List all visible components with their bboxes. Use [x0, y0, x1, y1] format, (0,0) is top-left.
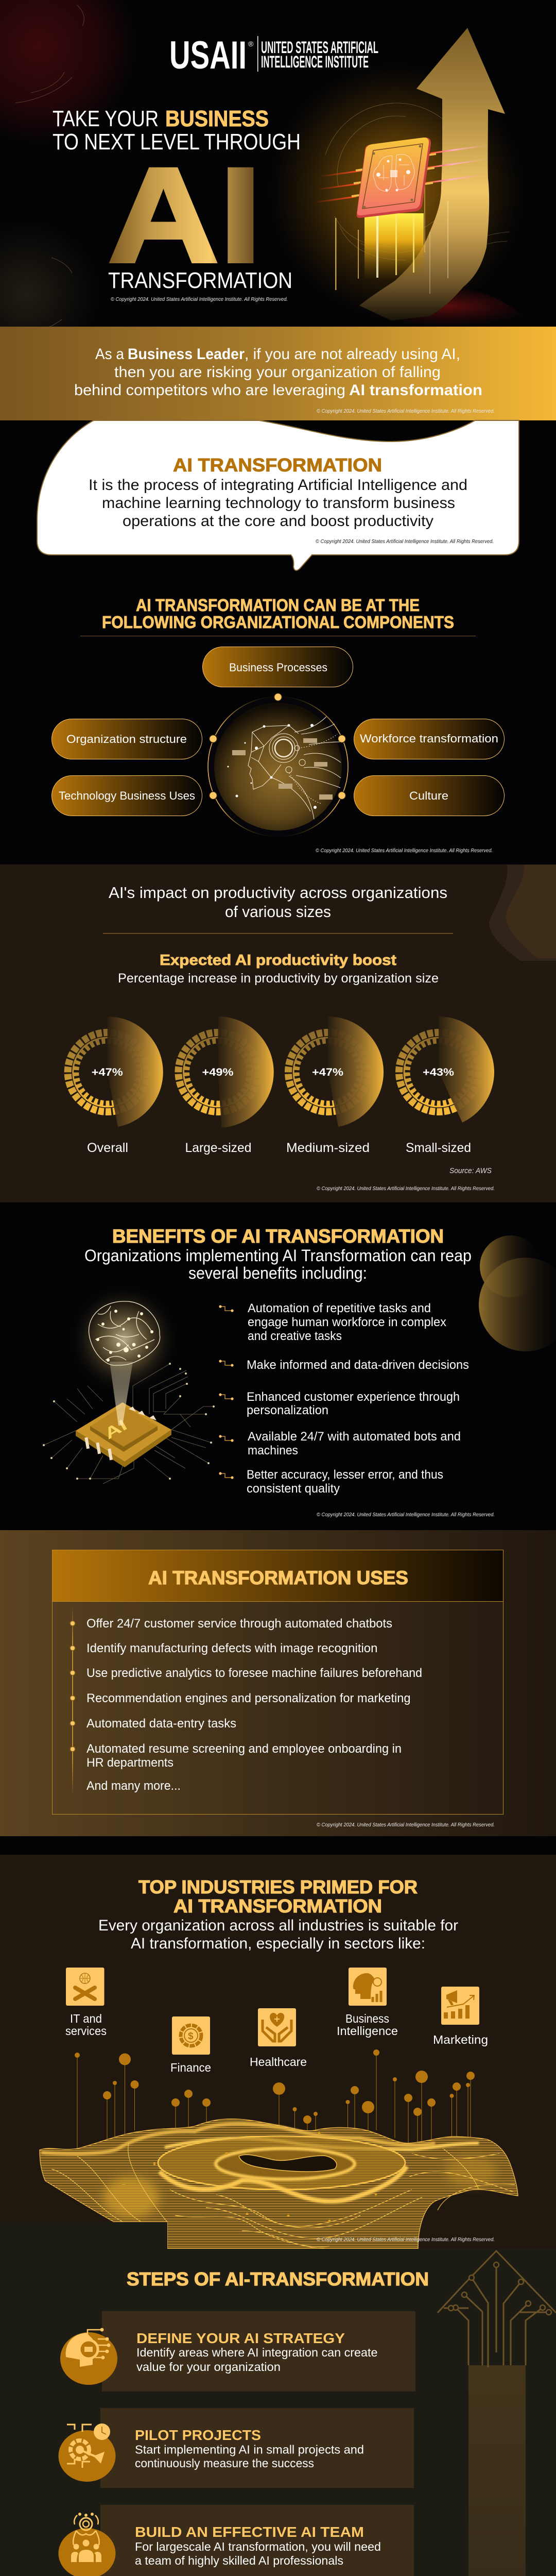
illustration: brain over AI chip [43, 1283, 215, 1484]
illustration: brain over AI chip: AI [101, 1416, 130, 1443]
panel: uses header: AI TRANSFORMATION USES [148, 1567, 408, 1588]
heading: several benefits including: [188, 1264, 367, 1282]
illustration: terrain mesh with pins [40, 2049, 518, 2249]
section: productivity impact [0, 865, 556, 1202]
industry: IT and services: services [65, 2024, 107, 2038]
hero title: AI [108, 140, 262, 291]
step 1: Identify areas where AI integration can create [136, 2346, 378, 2359]
section: steps of AI transformation [0, 2222, 556, 2576]
panel: uses list: Recommendation engines and personalization for marketing [86, 1691, 411, 1705]
definition text: It is the process of integrating Artificial Intelligence and [89, 477, 467, 494]
hero title [53, 106, 301, 302]
panel: uses list: HR departments [86, 1756, 173, 1770]
panel: uses list: Use predictive analytics to foresee machine failures beforehand [86, 1666, 422, 1680]
text: © Copyright 2024. United States Artificial Intelligence Institute. All Rights Reserved. [316, 848, 493, 854]
definition text: © Copyright 2024. United States Artificial Intelligence Institute. All Rights Reserved. [316, 538, 494, 545]
benefit: customer experience [219, 1390, 460, 1417]
industry: IT and services [65, 1968, 107, 2038]
heading: organizational components [80, 596, 476, 636]
banner: business leader warning: behind competitors who are leveraging [74, 382, 345, 399]
pill: technology business uses: Technology Business Uses [59, 789, 195, 802]
logo: USAII: ® [248, 40, 254, 48]
industry: finance [170, 2016, 211, 2074]
industry: marketing: Marketing [433, 2033, 488, 2046]
definition text [89, 454, 494, 545]
heading: organizational components: AI TRANSFORMATION CAN BE AT THE [136, 596, 420, 615]
step 3 [59, 2505, 414, 2576]
panel: uses list: Identify manufacturing defects with image recognition [86, 1641, 378, 1655]
panel: uses list: Automated resume screening and employee onboarding in [86, 1742, 402, 1756]
source: Source: AWS [449, 1166, 492, 1175]
radial chart: large-sized [178, 1016, 274, 1128]
circuit wires [315, 144, 488, 203]
intro text: of various sizes [225, 903, 331, 921]
logo: USAII: INTELLIGENCE INSTITUTE [261, 53, 369, 71]
benefit: accuracy: consistent quality [247, 1482, 340, 1496]
pill: business processes: Business Processes [229, 661, 327, 674]
pill: culture [354, 776, 505, 816]
panel: uses list: And many more... [86, 1779, 181, 1793]
radial chart: small-sized: +43% [423, 1066, 454, 1078]
benefit: automation: and creative tasks [248, 1329, 342, 1343]
step 2: Start implementing AI in small projects and [135, 2443, 364, 2456]
step 3: BUILD AN EFFECTIVE AI TEAM [135, 2524, 364, 2540]
industry: finance: Finance [170, 2061, 211, 2074]
industry: healthcare [250, 2008, 307, 2069]
heading: TOP INDUSTRIES PRIMED FOR [138, 1876, 418, 1897]
heading [98, 1876, 458, 1952]
chart heading [118, 952, 439, 986]
panel: uses list: Automated data-entry tasks [86, 1717, 236, 1731]
section: benefits: © Copyright 2024. United States Artificial Intelligence Institute. All Rights Reserved. [317, 1512, 495, 1518]
step 2: PILOT PROJECTS [135, 2427, 261, 2443]
definition text: machine learning technology to transform business [102, 495, 455, 512]
pill: workforce transformation [354, 719, 505, 759]
step 1 [60, 2311, 415, 2392]
step 3: a team of highly skilled AI professionals [135, 2554, 343, 2567]
benefit: automation: engage human workforce in complex [248, 1315, 446, 1329]
benefit: availability: Available 24/7 with automated bots and [248, 1430, 461, 1444]
hero title: BUSINESS [165, 106, 269, 131]
banner: business leader warning: , if you are not already using AI, [245, 346, 460, 363]
section: top industries [0, 1855, 556, 2249]
heading: STEPS OF AI-TRANSFORMATION [127, 2268, 429, 2290]
banner: business leader warning: AI transformation [349, 382, 482, 399]
industry: business intelligence [337, 1968, 398, 2038]
industry: marketing [433, 1987, 488, 2046]
section: uses [0, 1530, 556, 1836]
pill: organization structure [51, 719, 202, 759]
hero title: © Copyright 2024. United States Artificial Intelligence Institute. All Rights Reserved. [111, 296, 288, 302]
speech bubble [37, 420, 519, 570]
panel: uses list: Offer 24/7 customer service through automated chatbots [86, 1617, 392, 1631]
section: steps of AI transformation: © Copyright 2024. United States Artificial Intelligence Institute. All Rights Reserved. [317, 2236, 495, 2243]
banner: business leader warning: As a [95, 346, 124, 363]
chart labels: Small-sized [406, 1141, 471, 1155]
hero title: TAKE YOUR [53, 106, 159, 131]
section: AI transformation definition [0, 420, 556, 865]
step 2: continuously measure the success [135, 2456, 314, 2470]
radial chart: overall [68, 1016, 163, 1127]
banner: business leader warning: then you are risking your organization of falling [114, 364, 441, 381]
step 2 [59, 2408, 414, 2488]
section: benefits [0, 1202, 556, 1530]
banner: business leader warning [0, 327, 556, 420]
heading: Organizations implementing AI Transformation can reap [84, 1246, 472, 1265]
chart labels: Overall [87, 1141, 128, 1155]
benefit: customer experience: Enhanced customer experience through [247, 1390, 460, 1404]
benefit: accuracy [219, 1468, 443, 1496]
pill: workforce transformation: Workforce transformation [360, 732, 498, 745]
benefit: automation [219, 1301, 446, 1343]
banner: business leader warning: Business Leader [128, 346, 245, 363]
logo: USAII [169, 33, 378, 77]
pill: culture: Culture [409, 789, 448, 802]
benefit: availability [219, 1430, 461, 1458]
logo: USAII: UNITED STATES ARTIFICIAL [261, 38, 378, 57]
step 1: DEFINE YOUR AI STRATEGY [136, 2330, 345, 2346]
pill: business processes [203, 647, 353, 687]
benefit: customer experience: personalization [247, 1403, 328, 1417]
heading [84, 1226, 472, 1282]
icon: growth arrow [359, 28, 505, 320]
radial chart: large-sized: +49% [202, 1066, 234, 1078]
chart labels: Medium-sized [286, 1141, 370, 1155]
heading: AI TRANSFORMATION [173, 1895, 382, 1917]
light beams under chip [335, 185, 448, 294]
heading: organizational components: FOLLOWING ORGANIZATIONAL COMPONENTS [102, 613, 454, 632]
chart heading: Expected AI productivity boost [160, 952, 396, 969]
step 3: For largescale AI transformation, you will need [135, 2540, 381, 2553]
logo: USAII: USAII [169, 33, 247, 77]
section: uses: © Copyright 2024. United States Artificial Intelligence Institute. All Rights Reserved. [317, 1822, 495, 1828]
benefit: availability: machines [248, 1444, 298, 1458]
industry: business intelligence: Intelligence [337, 2024, 398, 2038]
definition text: AI TRANSFORMATION [173, 454, 382, 476]
chart heading: Percentage increase in productivity by organization size [118, 971, 439, 986]
radial chart: medium-sized [288, 1016, 384, 1127]
benefit: decisions: Make informed and data-driven decisions [247, 1358, 469, 1372]
decorative circuit arrow [438, 2251, 556, 2576]
panel: uses list [53, 1601, 503, 1815]
benefit: automation: Automation of repetitive tasks and [248, 1301, 431, 1315]
text: © Copyright 2024. United States Artificial Intelligence Institute. All Rights Reserved. [317, 1185, 495, 1192]
intro text [103, 884, 453, 934]
globe: AI head illustration [208, 693, 348, 837]
hero title: TO NEXT LEVEL THROUGH [53, 129, 301, 155]
industry: finance: $ [188, 2031, 194, 2042]
banner: business leader warning: © Copyright 2024. United States Artificial Intelligence Institute. All Rights Reserved. [317, 408, 495, 414]
step 1: value for your organization [136, 2360, 281, 2374]
benefit: accuracy: Better accuracy, lesser error, and thus [247, 1468, 443, 1482]
panel: uses header [53, 1550, 503, 1601]
chart labels: Large-sized [185, 1141, 251, 1155]
definition text: operations at the core and boost productivity [123, 513, 433, 530]
heading: BENEFITS OF AI TRANSFORMATION [112, 1226, 444, 1247]
icon: AI chip [357, 138, 431, 218]
pill: organization structure: Organization structure [66, 733, 187, 745]
radial chart: overall: +47% [92, 1066, 123, 1078]
hero title: TRANSFORMATION [108, 268, 292, 293]
heading: AI transformation, especially in sectors like: [131, 1935, 425, 1952]
industry: healthcare: Healthcare [250, 2055, 307, 2069]
radial chart: small-sized [399, 1016, 494, 1123]
heading: Every organization across all industries is suitable for [98, 1917, 458, 1934]
radial chart: medium-sized: +47% [312, 1066, 343, 1078]
pill: technology business uses [51, 776, 202, 816]
section: hero [0, 0, 556, 368]
industry: IT and services: IT and [70, 2012, 102, 2025]
chart labels [87, 1141, 471, 1155]
intro text: AI's impact on productivity across organizations [109, 884, 447, 902]
industry: business intelligence: Business [345, 2012, 389, 2025]
